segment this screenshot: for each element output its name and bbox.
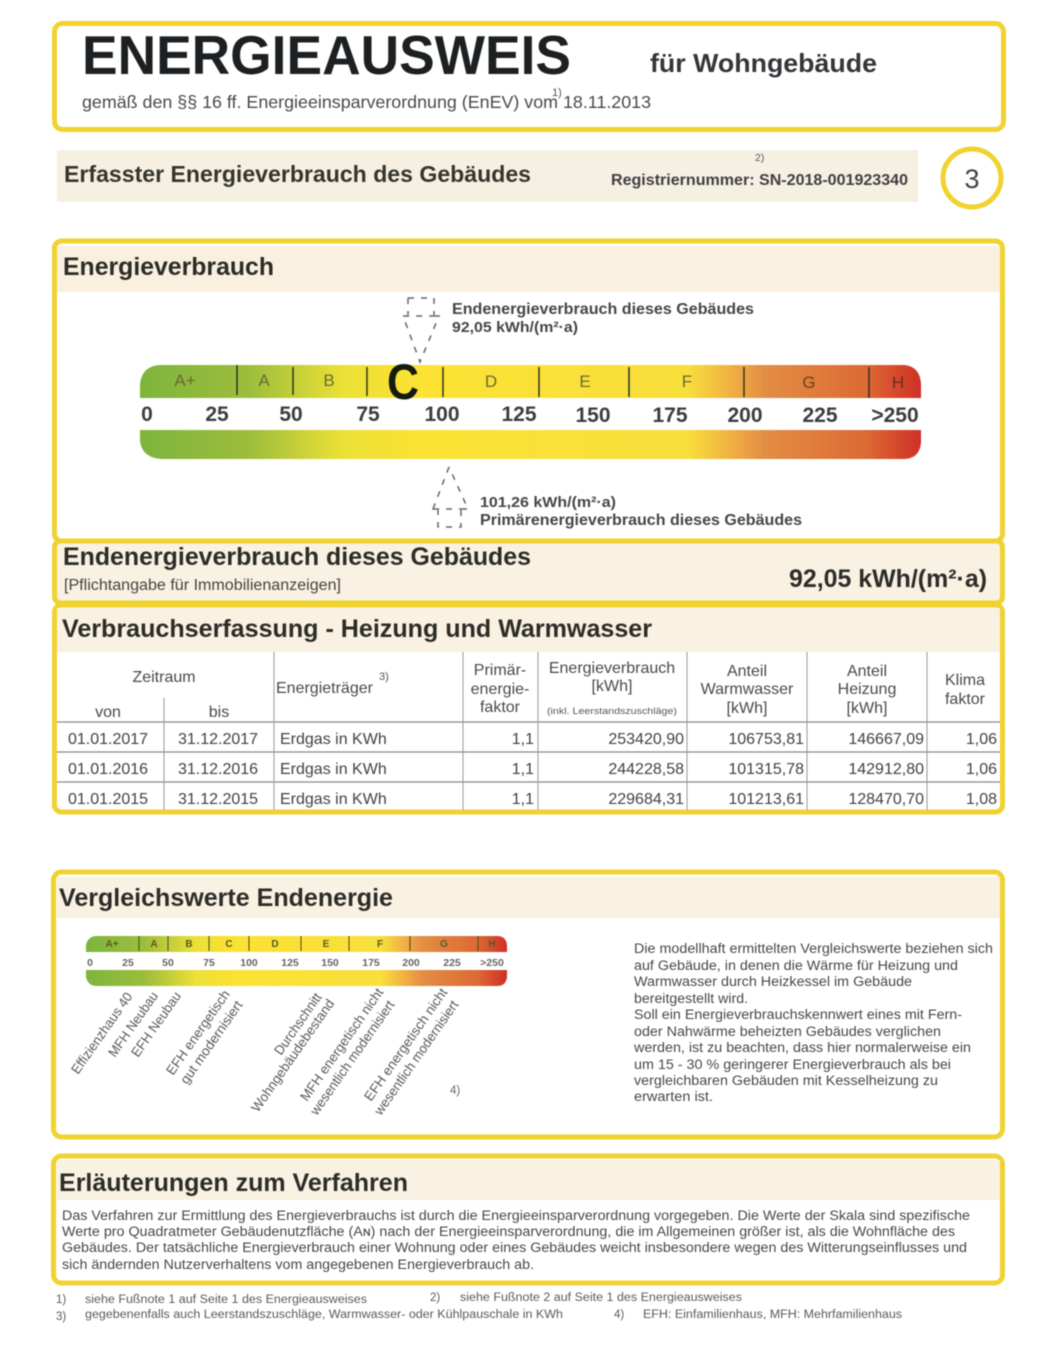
- table row 2016: 1,06: [966, 761, 997, 778]
- procedure explanation text: Das Verfahren zur Ermittlung des Energieverbrauchs ist durch die Energieeinsparverordnung vorgegeben. Die Werte der Skala sind spezifische: [62, 1208, 970, 1223]
- comparison explanation text: erwarten ist.: [634, 1089, 713, 1104]
- table row 2017: 146667,09: [848, 731, 924, 748]
- rotated comparison labels: wesentlich modernisiert: [307, 998, 398, 1119]
- mini scale numbers: 0: [87, 957, 93, 969]
- scale numbers: 200: [727, 404, 763, 427]
- table header: Zeitraum: [132, 669, 196, 686]
- panel: Verbrauchserfassung: [54, 605, 1002, 812]
- section heading: Erfasster Energieverbrauch des Gebäudes: [64, 161, 531, 187]
- rotated comparison labels: Wohngebäudebestand: [248, 996, 337, 1115]
- footnotes: siehe Fußnote 2 auf Seite 1 des Energieausweises: [460, 1292, 742, 1304]
- table row 2016: 1,1: [512, 761, 534, 778]
- rotated comparison labels: Effizienzhaus 40: [68, 989, 136, 1077]
- table header: Anteil: [727, 663, 767, 680]
- mini gradient bar: [86, 970, 507, 986]
- table row 2015: [68, 791, 997, 808]
- table row 2015: 1,08: [966, 791, 997, 808]
- energy class scale: G: [802, 373, 816, 392]
- energy class scale: A+: [174, 371, 196, 390]
- rotated comparison labels: [68, 985, 462, 1119]
- table row 2015: 1,1: [512, 791, 534, 808]
- panel: Vergleichswerte Endenergie: [54, 872, 1002, 1137]
- table row 2016: 31.12.2016: [178, 761, 258, 778]
- top marker arrow: final energy: [403, 298, 439, 362]
- bottom marker label: Primärenergieverbrauch dieses Gebäudes: [480, 512, 802, 529]
- mini scale numbers: 225: [443, 957, 461, 969]
- panel: Endenergieverbrauch summary: [54, 541, 1002, 603]
- comparison explanation text: Soll ein Energieverbrauchskennwert eines mit Fern-: [634, 1007, 962, 1022]
- scale numbers: 175: [652, 404, 688, 427]
- mini class scale: G: [440, 939, 448, 950]
- table header: von: [95, 704, 121, 721]
- table header: faktor: [480, 699, 521, 716]
- mini scale numbers: 100: [240, 957, 258, 969]
- mini scale numbers: [87, 957, 504, 969]
- consumption table: [57, 652, 1000, 810]
- panel: Energieverbrauch: [54, 241, 1002, 541]
- table header: Primär-: [474, 662, 526, 679]
- footnotes: 2): [430, 1292, 440, 1304]
- comparison explanation text: [633, 941, 993, 1104]
- table header: bis: [209, 704, 229, 721]
- comparison explanation text: oder Nahwärme beheizten Gebäudes verglichen: [634, 1024, 941, 1039]
- table row 2016: [68, 761, 997, 778]
- table row 2015: 229684,31: [608, 791, 684, 808]
- mini class scale: D: [271, 939, 279, 950]
- mini scale numbers: 50: [162, 957, 174, 969]
- energy class scale: C: [387, 354, 419, 410]
- mini class scale: [86, 936, 507, 952]
- table header: Heizung: [838, 681, 896, 698]
- title: ENERGIEAUSWEIS: [82, 24, 571, 86]
- mini scale numbers: 150: [321, 957, 339, 969]
- procedure explanation text: Gebäudes. Der tatsächliche Energieverbrauch einer Wohnung oder eines Gebäudes weicht insbesondere wegen des Witterungseinflusses und: [62, 1240, 967, 1255]
- table row 2016: 101315,78: [728, 761, 804, 778]
- table header: [kWh]: [592, 678, 632, 695]
- rotated comparison labels: EFH energetisch nicht: [361, 985, 450, 1104]
- procedure explanation text: Werte pro Quadratmeter Gebäudenutzfläche (Aɴ) nach der Energieeinsparverordnung, die im Allgemeinen größer ist, als die Wohnfläche des: [62, 1224, 955, 1239]
- table row 2015: 101213,61: [728, 791, 804, 808]
- scale numbers: 150: [575, 404, 611, 427]
- comparison explanation text: Die modellhaft ermittelten Vergleichswerte beziehen sich: [634, 941, 993, 956]
- mini class scale: E: [323, 939, 330, 950]
- scale numbers: 0: [141, 403, 153, 426]
- footnote marker 1: 1): [552, 87, 562, 99]
- table row 2016: 01.01.2016: [68, 761, 148, 778]
- comparison explanation text: Warmwasser durch Heizkessel im Gebäude: [634, 974, 912, 989]
- table row 2017: 1,06: [966, 731, 997, 748]
- table row 2015: 31.12.2015: [178, 791, 258, 808]
- footnotes: gegebenenfalls auch Leerstandszuschläge, Warmwasser- oder Kühlpauschale in KWh: [85, 1309, 563, 1321]
- table row 2017: Erdgas in KWh: [280, 731, 387, 748]
- table header: Energieträger: [276, 680, 374, 697]
- subtitle: für Wohngebäude: [650, 48, 877, 78]
- footnotes: [56, 1292, 902, 1323]
- energy class scale: D: [485, 372, 497, 391]
- mini class scale: A+: [105, 939, 119, 950]
- procedure explanation text: sich ändernden Nutzerverhaltens vom angegebenen Energieverbrauch ab.: [62, 1257, 534, 1272]
- table row 2016: Erdgas in KWh: [280, 761, 387, 778]
- bottom marker arrow: primary energy: [433, 467, 468, 527]
- table row 2017: [68, 731, 997, 748]
- rotated comparison labels: Durchschnitt: [271, 990, 325, 1058]
- registration number: Registriernummer: SN-2018-001923340: [611, 172, 908, 189]
- table row 2016: 142912,80: [848, 761, 924, 778]
- section bar: recorded energy consumption: [57, 150, 918, 202]
- footnotes: 3): [56, 1311, 66, 1323]
- mini class scale: F: [377, 939, 383, 950]
- panel: header: [54, 24, 1004, 130]
- scale numbers: >250: [871, 404, 919, 427]
- table row 2015: Erdgas in KWh: [280, 791, 387, 808]
- table header: [kWh]: [847, 700, 887, 717]
- table row 2017: 106753,81: [728, 731, 804, 748]
- rotated comparison labels: MFH Neubau: [105, 989, 161, 1060]
- footnotes: EFH: Einfamilienhaus, MFH: Mehrfamilienhaus: [643, 1309, 902, 1321]
- scale numbers: 50: [279, 403, 303, 426]
- comparison explanation text: bereitgestellt wird.: [634, 991, 748, 1006]
- table header: [95, 660, 986, 721]
- top marker label: 92,05 kWh/(m²·a): [452, 319, 578, 336]
- table row 2017: 31.12.2017: [178, 731, 258, 748]
- energy class scale: E: [579, 372, 591, 391]
- page number badge: 3: [964, 164, 980, 194]
- primary energy gradient bar: [140, 430, 921, 459]
- table header: Energieverbrauch: [549, 660, 675, 677]
- rotated comparison labels: EFH energetisch: [163, 987, 233, 1078]
- scale numbers: 225: [802, 404, 838, 427]
- page number badge: [943, 149, 1001, 207]
- rotated comparison labels: MFH energetisch nicht: [297, 985, 386, 1104]
- mini scale numbers: 175: [362, 957, 380, 969]
- panel heading: Erläuterungen zum Verfahren: [59, 1169, 408, 1197]
- mini class scale: B: [185, 939, 193, 950]
- energy class scale: [140, 354, 921, 410]
- footnote marker 2: 2): [755, 152, 764, 164]
- energy class scale: H: [892, 373, 904, 392]
- table row 2017: 253420,90: [608, 731, 684, 748]
- footnotes: siehe Fußnote 1 auf Seite 1 des Energieausweises: [85, 1294, 367, 1306]
- scale numbers: [141, 403, 919, 427]
- table header: Anteil: [847, 663, 887, 680]
- summary value: 92,05 kWh/(m²·a): [789, 565, 987, 593]
- comparison explanation text: auf Gebäude, in denen die Wärme für Heizung und: [634, 958, 958, 973]
- mini scale numbers: 75: [203, 957, 215, 969]
- rotated comparison labels: EFH Neubau: [128, 989, 184, 1060]
- rotated comparison labels: wesentlich modernisiert: [371, 998, 462, 1119]
- mini scale numbers: >250: [480, 957, 504, 969]
- energy class scale: F: [682, 372, 692, 391]
- mandatory note: [Pflichtangabe für Immobilienanzeigen]: [64, 577, 341, 594]
- table row 2015: 128470,70: [848, 791, 924, 808]
- comparison explanation text: um 15 - 30 % geringerer Energieverbrauch als bei: [634, 1057, 951, 1072]
- scale numbers: 100: [424, 403, 460, 426]
- mini class scale: C: [225, 939, 233, 950]
- footnotes: 4): [614, 1309, 624, 1321]
- comparison explanation text: werden, ist zu beachten, dass hier normalerweise ein: [633, 1040, 971, 1055]
- energy class scale: B: [323, 371, 335, 390]
- footnote marker 4: 4): [450, 1085, 460, 1097]
- scale numbers: 125: [501, 403, 537, 426]
- comparison explanation text: vergleichbaren Gebäuden mit Kesselheizung zu: [634, 1073, 938, 1088]
- panel heading: Vergleichswerte Endenergie: [59, 884, 393, 912]
- table header: faktor: [945, 691, 986, 708]
- mini class scale: A: [150, 939, 158, 950]
- scale numbers: 75: [356, 403, 380, 426]
- mini scale numbers: 200: [402, 957, 420, 969]
- scale numbers: 25: [205, 403, 229, 426]
- top marker label: [452, 301, 754, 336]
- mini scale numbers: 125: [281, 957, 299, 969]
- table header: Klima: [945, 672, 985, 689]
- table header: 3): [379, 671, 389, 683]
- table row 2015: 01.01.2015: [68, 791, 148, 808]
- table row 2017: 1,1: [512, 731, 534, 748]
- table row 2017: 01.01.2017: [68, 731, 148, 748]
- legal basis line: gemäß den §§ 16 ff. Energieeinsparverordnung (EnEV) vom 18.11.2013: [82, 92, 651, 112]
- panel: Erläuterungen zum Verfahren: [54, 1156, 1002, 1283]
- rotated comparison labels: gut modernisiert: [177, 998, 246, 1087]
- table header: (inkl. Leerstandszuschläge): [547, 706, 677, 717]
- procedure explanation text: [62, 1208, 970, 1272]
- mini class scale: H: [488, 939, 496, 950]
- table header: energie-: [471, 681, 529, 698]
- table row 2016: 244228,58: [608, 761, 684, 778]
- bottom marker label: [480, 494, 802, 529]
- footnotes: 1): [56, 1294, 66, 1306]
- energy class scale: A: [258, 371, 270, 390]
- panel heading: Verbrauchserfassung - Heizung und Warmwasser: [62, 615, 652, 643]
- summary heading: Endenergieverbrauch dieses Gebäudes: [63, 543, 531, 571]
- table header: [kWh]: [727, 700, 767, 717]
- bottom marker label: 101,26 kWh/(m²·a): [480, 494, 616, 511]
- table header: Warmwasser: [701, 681, 794, 698]
- top marker label: Endenergieverbrauch dieses Gebäudes: [452, 301, 754, 318]
- mini scale numbers: 25: [122, 957, 134, 969]
- panel heading: Energieverbrauch: [63, 253, 274, 281]
